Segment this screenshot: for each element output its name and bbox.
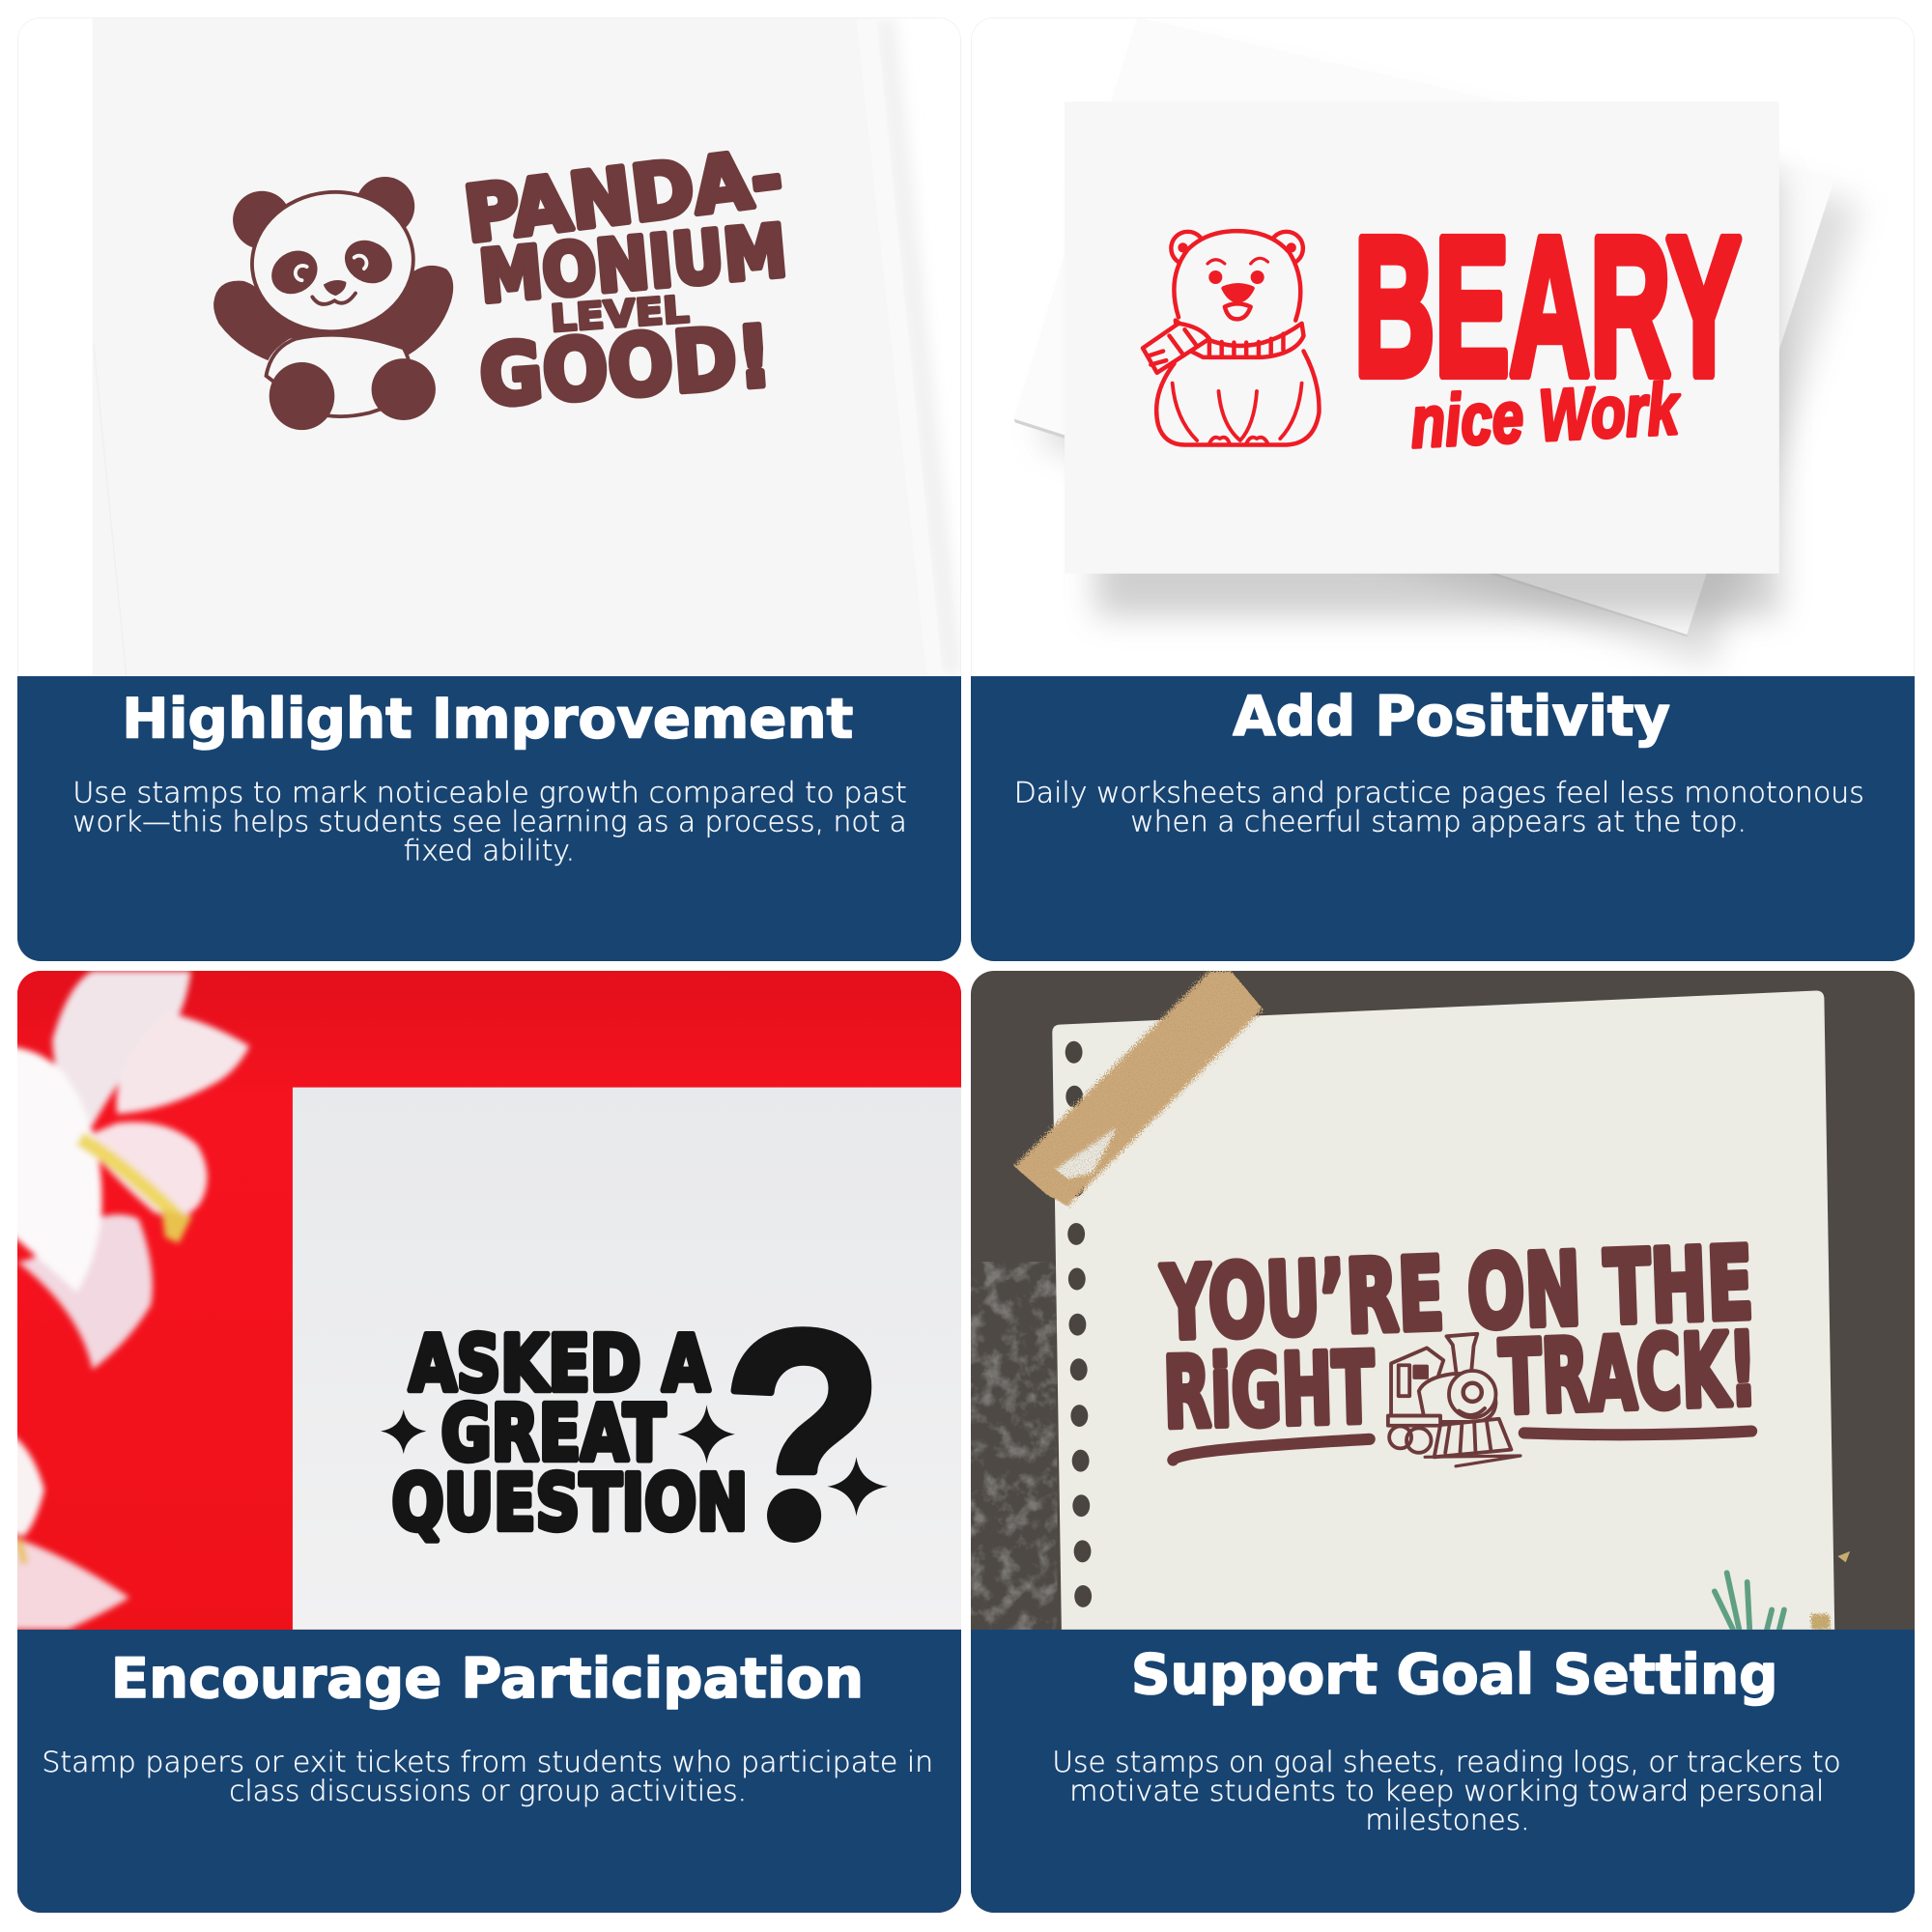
photo: question stamp on red background: [0, 966, 985, 1644]
stamp text: You're on the right track!: RiGHT: [1162, 1330, 1376, 1450]
body text: [72, 776, 907, 867]
body text: Use stamps on goal sheets, reading logs, or trackers to: [1052, 1746, 1841, 1778]
heading: Add Positivity: [1233, 684, 1670, 749]
stamp text: You're on the right track!: [1158, 1226, 1759, 1450]
icon: polar bear with scarf: [1143, 231, 1320, 444]
body text: [1055, 1749, 1839, 1831]
panel: Add Positivity: [971, 17, 1915, 961]
body text: motivate students to keep working toward personal: [1069, 1775, 1824, 1807]
plant: [1715, 1573, 1784, 1630]
stamp text: Beary nice work: [1358, 234, 1743, 449]
body text: [42, 1746, 933, 1807]
caption: Encourage Participation: [17, 1630, 961, 1913]
panel: Encourage Participation: [0, 966, 985, 1913]
washi tape: [1014, 971, 1263, 1207]
panel: Support Goal Setting: [971, 971, 1915, 1913]
body text: when a cheerful stamp appears at the top.: [1130, 805, 1747, 838]
body text: Daily worksheets and practice pages feel less monotonous: [1014, 776, 1864, 809]
stamp text: Asked a great question: ASKED A: [409, 1320, 710, 1408]
body text: Use stamps to mark noticeable growth compared to past: [72, 776, 907, 809]
stamp text: Panda-monium level good!: GOOD!: [476, 308, 775, 426]
caption: Add Positivity: [971, 676, 1915, 961]
body text: class discussions or group activities.: [229, 1775, 747, 1807]
icon: question mark dot and sparkles: [381, 1405, 888, 1543]
panel: Highlight Improvement: [17, 17, 961, 961]
stamp text: Panda-monium level good!: LEVEL: [549, 288, 691, 341]
stamp text: Asked a great question: QUESTION: [392, 1459, 748, 1548]
stamp text: Asked a great question: GREAT: [441, 1389, 666, 1478]
photo: train stamp on notebook paper: [971, 971, 1850, 1632]
heading: Encourage Participation: [111, 1646, 864, 1711]
caption: Highlight Improvement: [17, 676, 961, 961]
gold flecks: [1811, 1551, 1850, 1630]
photo: bear stamp on cards: [1014, 162, 1862, 668]
body text: fixed ability.: [404, 834, 575, 867]
heading: Support Goal Setting: [1131, 1642, 1778, 1707]
stamp text: Panda-monium level good!: [466, 151, 786, 408]
icon: train: [1388, 1334, 1520, 1466]
body text: work—this helps students see learning as a process, not a: [72, 805, 907, 838]
stamp text: Panda-monium level good!: MONIUM: [476, 210, 790, 319]
stamp text: Asked a great question: ?: [722, 1271, 884, 1593]
icon: panda: [213, 177, 453, 430]
photo: panda stamp on paper: [93, 17, 961, 676]
stamp text: Panda-monium level good!: PANDA-: [460, 132, 787, 260]
body text: [1014, 776, 1864, 838]
icon: white flowers: [0, 971, 249, 1630]
notebook holes: [1065, 1041, 1092, 1607]
stamp text: You're on the right track!: TRACK!: [1497, 1312, 1759, 1436]
body text: Stamp papers or exit tickets from students who participate in: [42, 1746, 933, 1778]
underlines: [1173, 1432, 1751, 1460]
body text: milestones.: [1365, 1804, 1530, 1836]
caption: Support Goal Setting: [971, 1630, 1915, 1913]
stamp text: Beary nice work: nice Work: [1408, 367, 1683, 463]
stamp text: Asked a great question: [392, 1326, 871, 1544]
heading: Highlight Improvement: [122, 686, 853, 751]
